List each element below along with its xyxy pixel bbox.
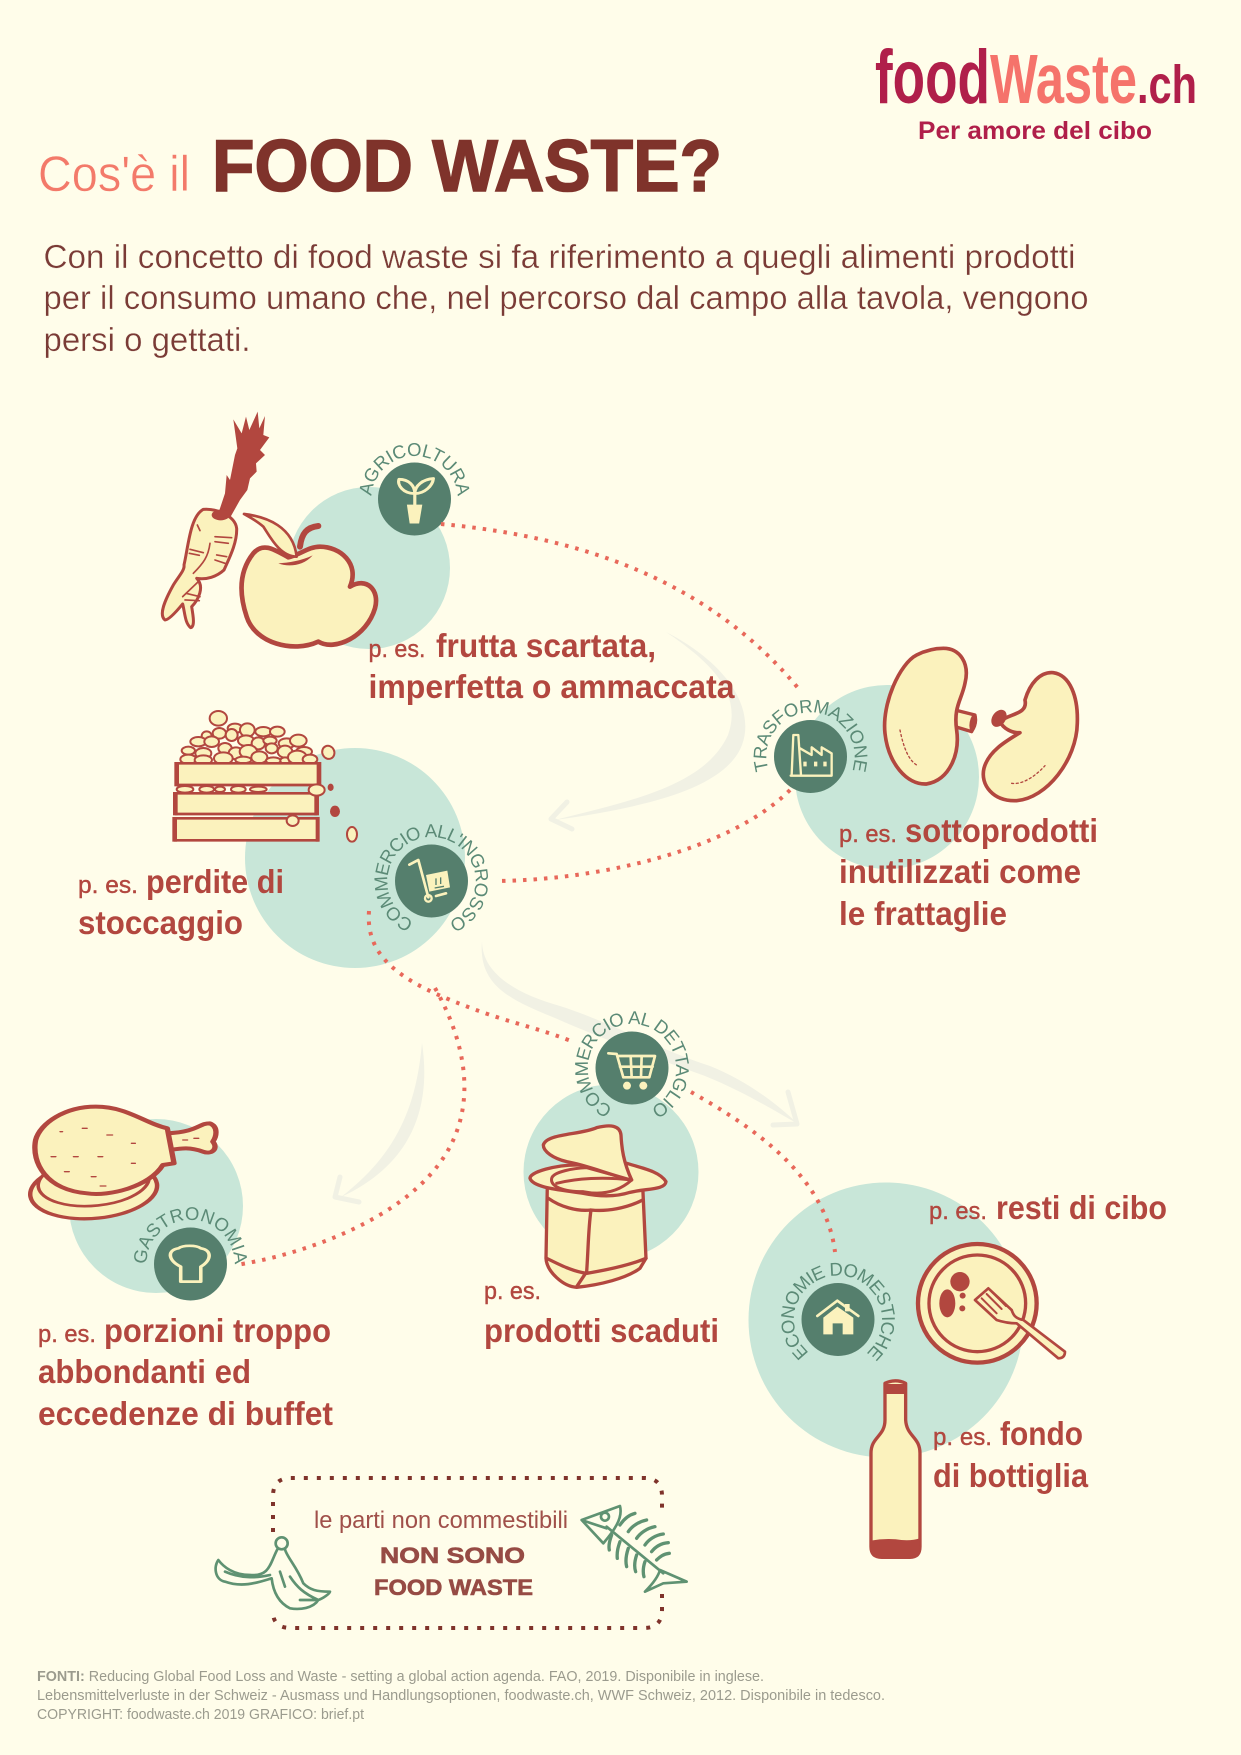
label: resti di cibo: resti di cibo <box>996 1189 1167 1226</box>
logo: foodWaste.ch: Waste <box>990 40 1137 118</box>
label: porzioni troppo abbondanti: porzioni troppo <box>104 1312 331 1349</box>
icon: chef hat <box>170 1246 209 1282</box>
label: sottoprodotti: inutilizzati come <box>839 853 1081 890</box>
label: frutta scartata: frutta scartata, <box>436 627 656 664</box>
logo: foodWaste.ch: .ch <box>1137 55 1197 115</box>
label: sottoprodotti: p. es. <box>839 821 897 848</box>
illustration: yogurt pot <box>530 1126 666 1287</box>
label: porzioni troppo abbondanti: abbondanti ed <box>38 1353 251 1390</box>
label: sottoprodotti <box>839 812 1098 932</box>
badge: commercio al dettaglio: COMMERCIO AL DETTAGLIO <box>575 1011 689 1116</box>
label: perdite di stoccaggio: perdite di <box>146 863 284 900</box>
connector: ingrosso to dettaglio <box>369 911 571 1041</box>
label: sottoprodotti: sottoprodotti <box>905 812 1098 849</box>
illustration: carrot and apple <box>162 412 376 646</box>
logo: foodWaste.ch: food <box>875 35 990 120</box>
illustration: crate of beans <box>172 711 357 842</box>
footer: sources: Lebensmittelverluste in der Schweiz - Ausmass und Handlungsoptionen, foodwaste.ch, WWF Schweiz, 2012. Disponibile in tedesco. <box>37 1688 885 1704</box>
label: fondo di bottiglia <box>933 1415 1089 1494</box>
connector: dettaglio to domestiche <box>691 1092 835 1252</box>
badge: gastronomia: GASTRONOMIA <box>134 1207 247 1264</box>
icon: hand truck <box>409 860 450 902</box>
callout: parti non commestibili: NON SONO <box>380 1543 525 1568</box>
panel: commercio al dettaglio <box>484 1011 719 1349</box>
label: porzioni troppo abbondanti: eccedenze di buffet <box>38 1395 333 1432</box>
connector: agricoltura to trasformazione <box>441 524 798 688</box>
footer: sources: COPYRIGHT: foodwaste.ch 2019 GRAFICO: brief.pt <box>37 1707 364 1723</box>
panel: commercio all'ingrosso <box>78 710 488 968</box>
label: frutta scartata: p. es. <box>368 636 426 663</box>
label: frutta scartata: imperfetta o ammaccata <box>368 668 735 705</box>
connector: trasformazione to ingrosso <box>496 790 790 881</box>
panel: economie domestiche <box>748 1182 1167 1559</box>
intro text: persi o gettati. <box>44 321 250 358</box>
intro text: Con il concetto di food waste si fa riferimento a quegli alimenti prodotti <box>44 238 1076 275</box>
connector: ingrosso to gastronomia <box>236 988 464 1265</box>
intro text: per il consumo umano che, nel percorso dal campo alla tavola, vengono <box>44 279 1088 316</box>
icon: shopping cart <box>608 1053 655 1090</box>
title: FOOD WASTE? <box>212 126 722 207</box>
badge: agricoltura: AGRICOLTURA <box>360 443 470 496</box>
label: porzioni troppo abbondanti <box>38 1312 333 1432</box>
label: perdite di stoccaggio: p. es. <box>78 872 138 899</box>
footer: sources: FONTI: Reducing Global Food Loss and Waste - setting a global action agenda. FAO, 2019. Disponibile in inglese. <box>37 1669 764 1685</box>
label: fondo di bottiglia: di bottiglia <box>933 1457 1089 1494</box>
label: prodotti scaduti <box>484 1278 719 1349</box>
illustration: plate with fork and bottle <box>871 1244 1065 1558</box>
label: resti di cibo: p. es. <box>929 1198 987 1225</box>
badge: commercio all'ingrosso: COMMERCIO ALL'INGROSSO <box>374 824 488 930</box>
panel: gastronomia <box>28 1104 333 1432</box>
label: sottoprodotti: le frattaglie <box>839 895 1007 932</box>
title: Cos'è il <box>38 146 190 202</box>
arrow: faint curve from ingrosso to gastronomia <box>335 1043 424 1202</box>
badge: economie domestiche: ECONOMIE DOMESTICHE <box>781 1262 895 1362</box>
label: resti di cibo <box>929 1189 1167 1226</box>
icon: house <box>817 1301 858 1334</box>
icon: factory <box>791 735 832 776</box>
panel: trasformazione <box>754 646 1098 932</box>
logo: foodWaste.ch <box>875 35 1197 145</box>
footer: sources <box>37 1669 885 1723</box>
arrow: faint curve from ingrosso to domestiche <box>482 941 798 1125</box>
callout: parti non commestibili: le parti non commestibili <box>314 1507 568 1534</box>
label: fondo di bottiglia: fondo <box>1000 1415 1083 1452</box>
illustration: chicken leg on plate <box>25 1107 216 1225</box>
label: prodotti scaduti: p. es. <box>484 1278 541 1305</box>
callout: parti non commestibili <box>273 1478 662 1628</box>
badge: gastronomia <box>134 1207 247 1300</box>
label: porzioni troppo abbondanti: p. es. <box>38 1321 96 1348</box>
intro text <box>44 238 1088 358</box>
label: perdite di stoccaggio <box>78 863 284 941</box>
logo: foodWaste.ch: Per amore del cibo <box>918 117 1152 145</box>
badge: agricoltura <box>360 443 470 536</box>
icon: banana peel <box>216 1537 330 1609</box>
arrow: faint curve from trasformazione to ingrosso <box>551 632 745 829</box>
label: perdite di stoccaggio: stoccaggio <box>78 904 243 941</box>
icon: plant <box>399 479 433 524</box>
callout: parti non commestibili: FOOD WASTE <box>374 1575 533 1600</box>
label: prodotti scaduti: prodotti scaduti <box>484 1312 719 1349</box>
panel: agricoltura <box>160 412 735 705</box>
label: frutta scartata <box>368 627 735 705</box>
badge: trasformazione: TRASFORMAZIONE <box>754 700 868 772</box>
icon: fish bone <box>582 1506 687 1592</box>
label: fondo di bottiglia: p. es. <box>933 1424 992 1451</box>
illustration: kidneys <box>885 648 1077 801</box>
